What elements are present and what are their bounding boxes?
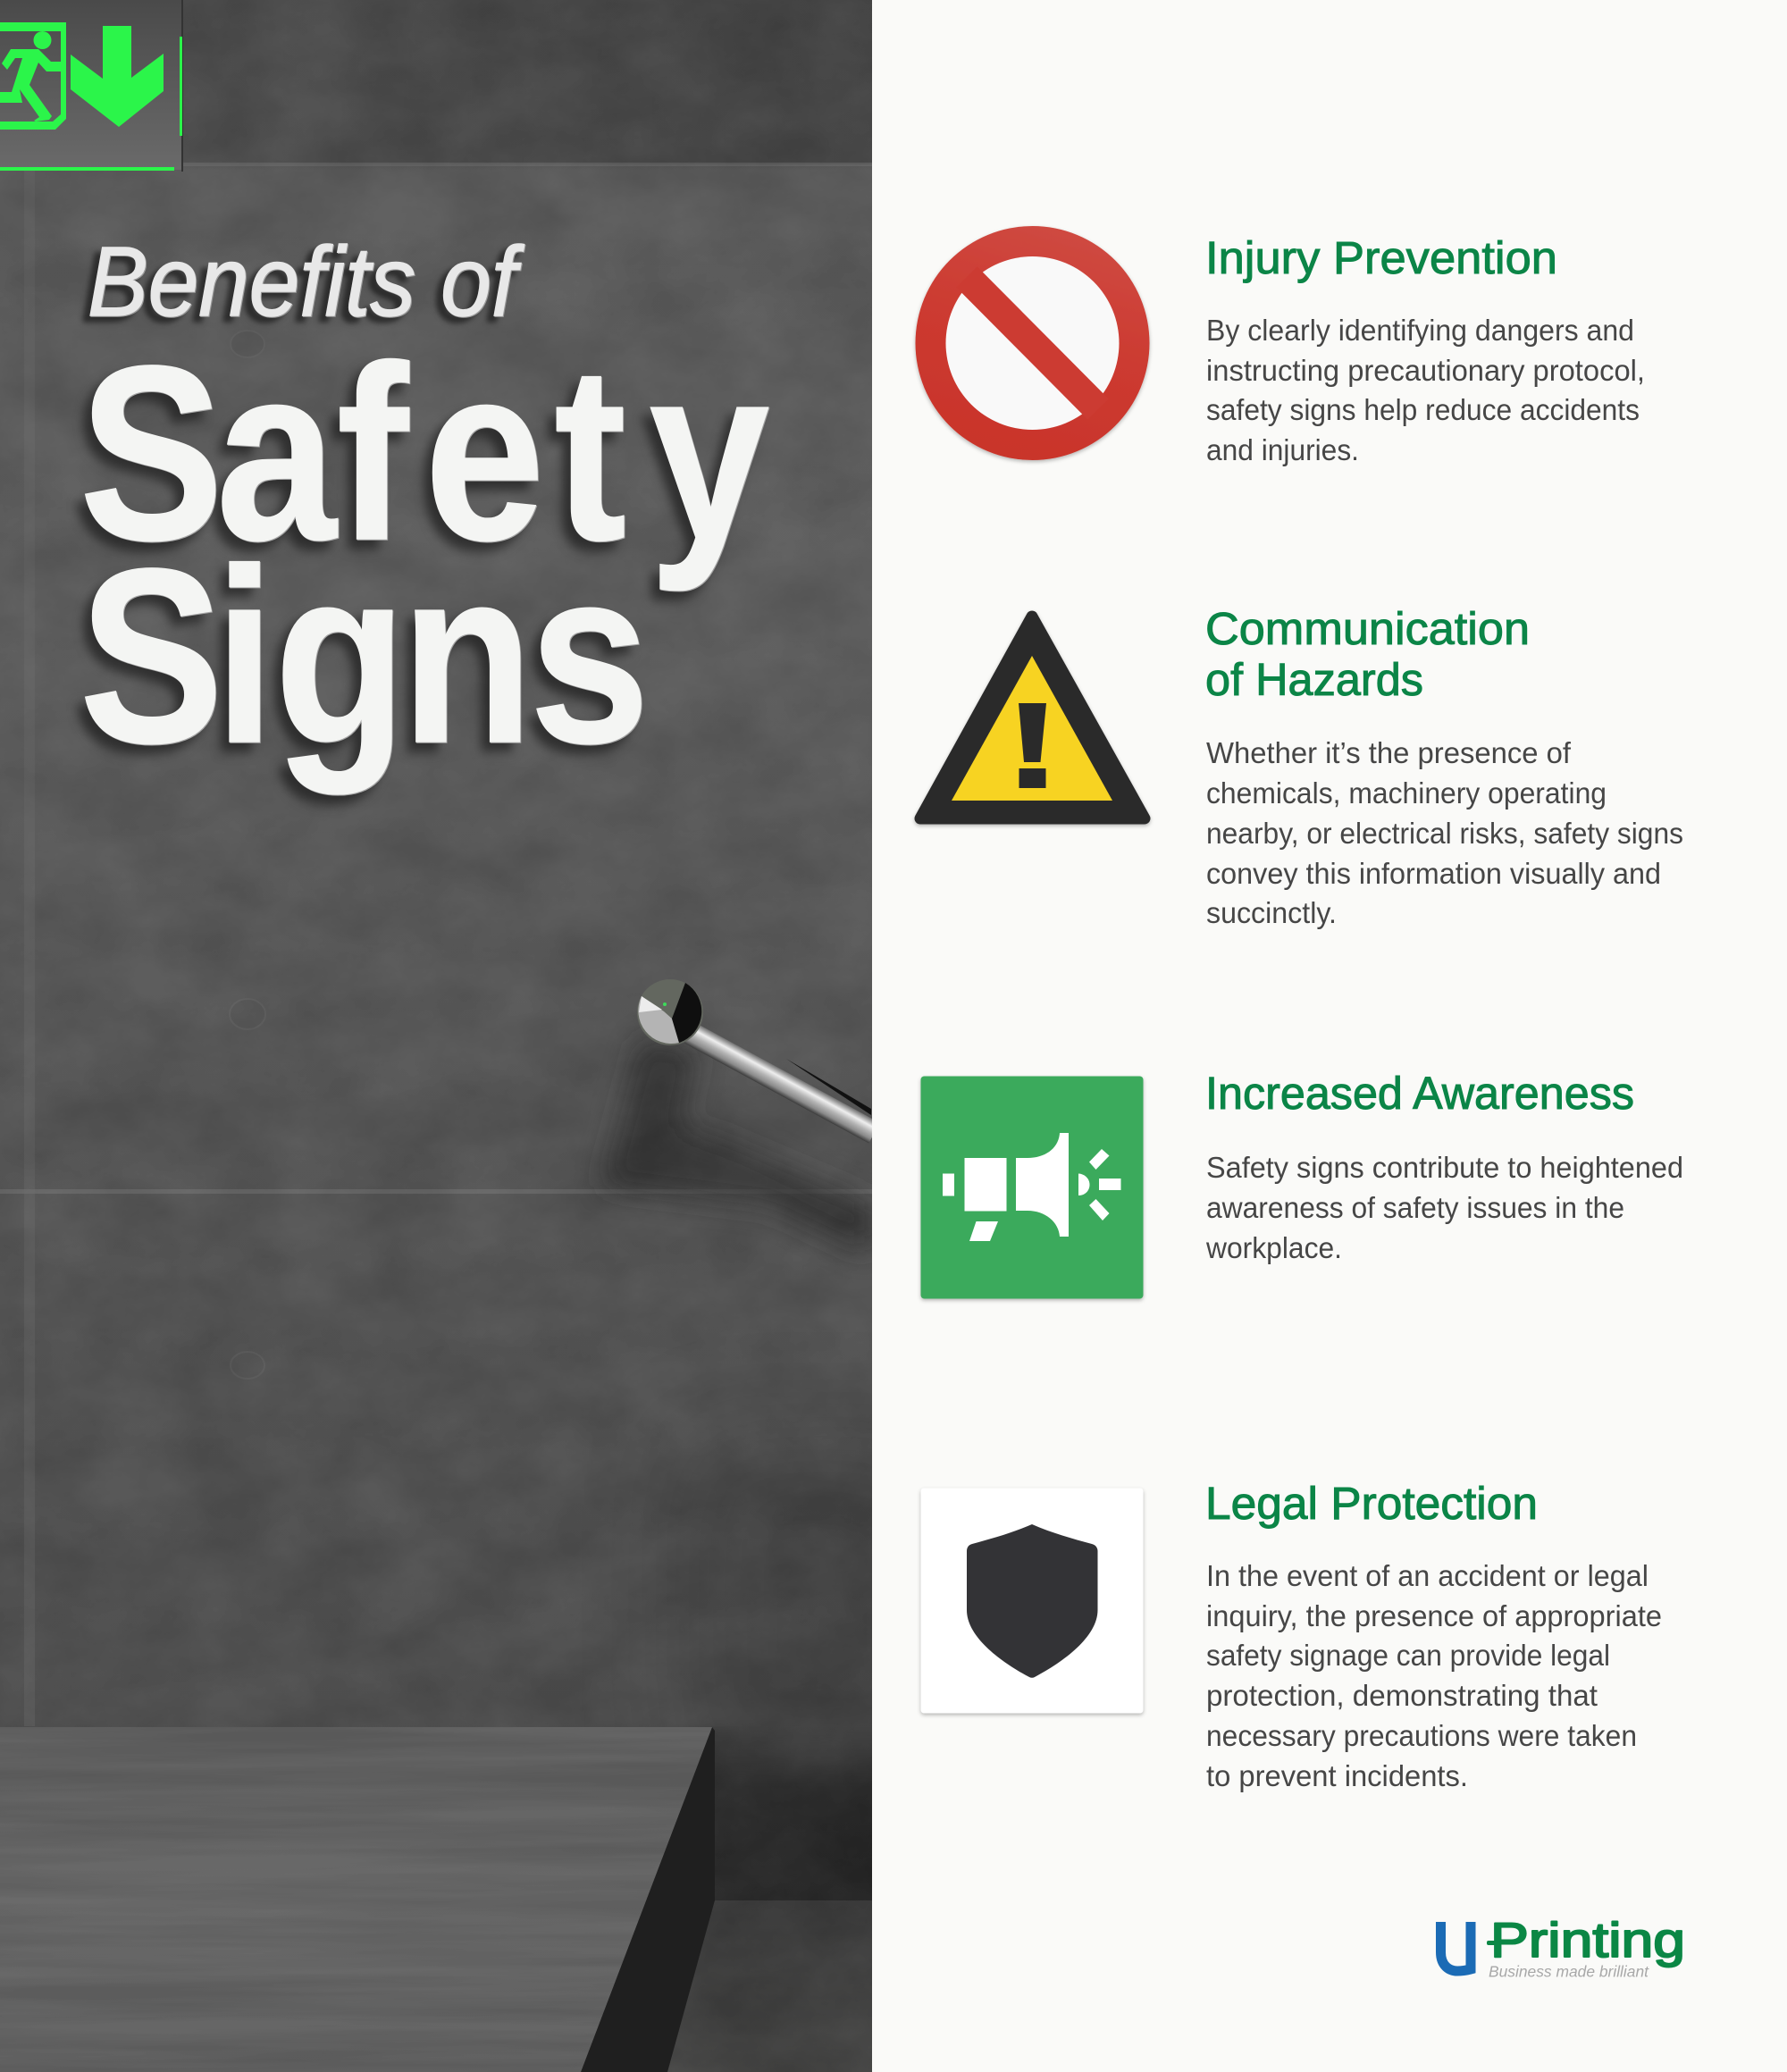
body text: safety signage can provide legal xyxy=(1206,1639,1610,1672)
body text: awareness of safety issues in the xyxy=(1206,1191,1624,1224)
title line: Benefits of: Benefits of xyxy=(88,227,525,337)
heading: Communication xyxy=(1205,603,1530,654)
shelf top xyxy=(0,1727,712,2072)
body text: convey this information visually and xyxy=(1206,857,1661,890)
running man frame xyxy=(0,22,66,130)
body text: chemicals, machinery operating xyxy=(1206,776,1607,810)
heading xyxy=(1205,603,1530,705)
body text: protection, demonstrating that xyxy=(1206,1679,1598,1712)
sign panel xyxy=(0,0,181,170)
running man xyxy=(0,31,61,122)
shelf side face xyxy=(581,1727,715,2072)
title xyxy=(80,227,770,796)
logo tagline: Business made brilliant xyxy=(1489,1962,1649,1980)
body text: to prevent incidents. xyxy=(1206,1759,1468,1792)
benefit: legal protection xyxy=(920,1478,1662,1792)
body text: workplace. xyxy=(1205,1231,1342,1264)
body text: Whether it’s the presence of xyxy=(1206,736,1572,769)
title line: Signs: Signs xyxy=(80,517,650,796)
body text: succinctly. xyxy=(1206,896,1337,929)
rail knob xyxy=(637,979,703,1045)
arrow down xyxy=(71,26,164,127)
panel: benefits background xyxy=(872,0,1787,2072)
icon: shield sign xyxy=(920,1489,1144,1714)
benefit: injury prevention xyxy=(915,226,1645,466)
title line: Safety: Safety xyxy=(80,315,770,593)
heading: Legal Protection xyxy=(1205,1478,1538,1529)
body text: safety signs help reduce accidents xyxy=(1206,393,1640,426)
heading: Injury Prevention xyxy=(1205,232,1557,283)
body text xyxy=(1206,1559,1662,1792)
benefit: increased awareness xyxy=(920,1068,1683,1299)
body text xyxy=(1205,1151,1683,1264)
handrail xyxy=(637,979,880,1144)
rail dark edge xyxy=(786,1059,871,1115)
body text xyxy=(1206,736,1683,929)
lower dark alcove xyxy=(711,1726,872,1901)
heading: Increased Awareness xyxy=(1205,1068,1634,1119)
body text: By clearly identifying dangers and xyxy=(1206,314,1634,347)
wall bolt holes xyxy=(230,331,265,1379)
logo mark: U xyxy=(1440,1922,1471,1971)
body text: In the event of an accident or legal xyxy=(1206,1559,1649,1592)
handrail shadow xyxy=(601,1039,872,1255)
body text: and injuries. xyxy=(1206,433,1359,466)
logo word: Printing: Printing xyxy=(1490,1912,1685,1967)
icon: prohibition sign xyxy=(915,226,1149,460)
heading: of Hazards xyxy=(1205,654,1423,705)
body text: instructing precautionary protocol, xyxy=(1206,354,1645,387)
icon: warning triangle xyxy=(920,617,1145,818)
logo crossbar xyxy=(1487,1941,1501,1945)
benefit: communication of hazards xyxy=(920,603,1683,929)
body text xyxy=(1206,314,1645,466)
sign glow edges xyxy=(0,37,182,171)
panel: concrete wall photo xyxy=(0,0,965,2072)
body text: nearby, or electrical risks, safety signs xyxy=(1206,817,1683,850)
icon: megaphone sign xyxy=(920,1076,1144,1299)
rail bar xyxy=(684,1023,880,1144)
logo: UPrinting xyxy=(1440,1912,1685,1980)
wall seam lines xyxy=(0,163,872,1726)
body text: Safety signs contribute to heightened xyxy=(1206,1151,1683,1184)
exit sign xyxy=(0,0,183,172)
body text: inquiry, the presence of appropriate xyxy=(1206,1599,1662,1632)
step floor xyxy=(667,1900,872,2072)
body text: necessary precautions were taken xyxy=(1206,1719,1637,1752)
